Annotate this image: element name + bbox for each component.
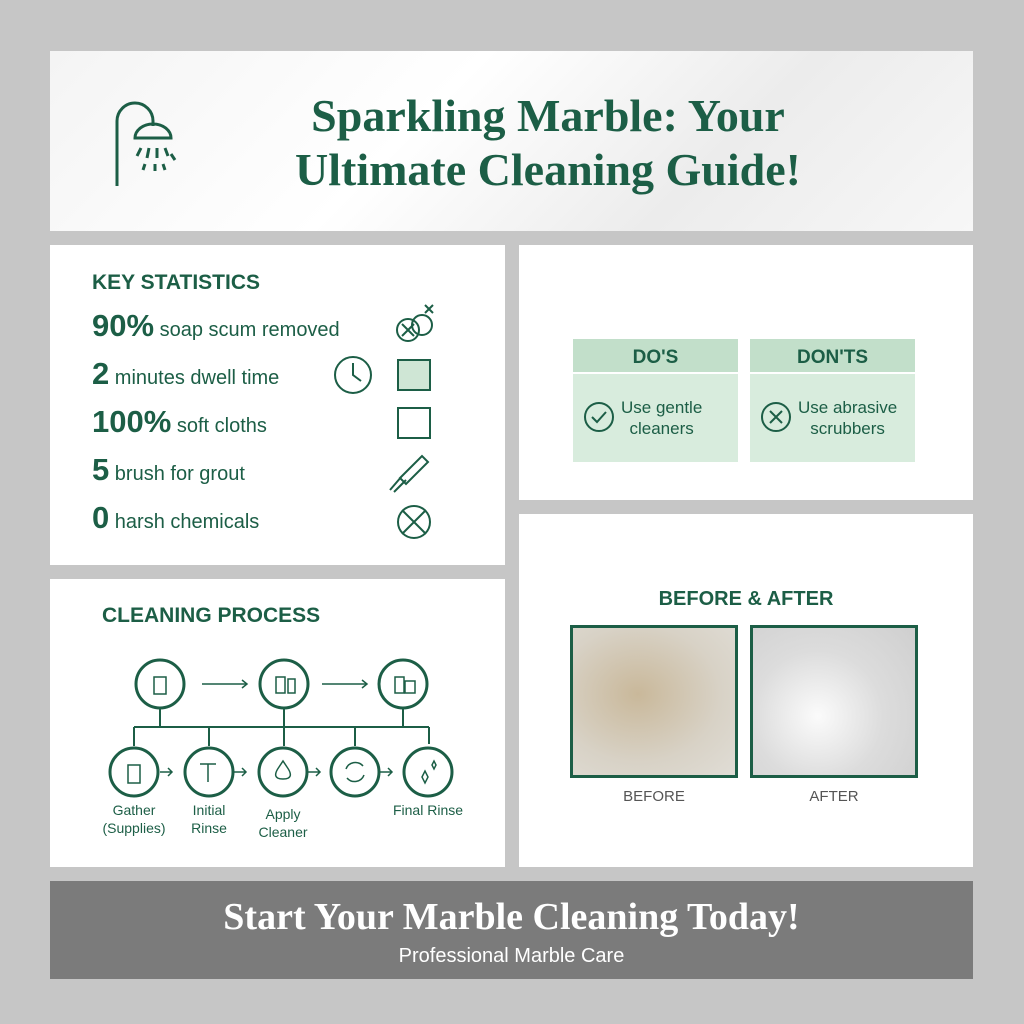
do's column: DO'S [633,347,678,368]
heading: KEY STATISTICS [92,271,260,294]
footer subtitle: Professional Marble Care [399,945,624,967]
stat rows: 90% soap scum removed [92,308,340,343]
title: Sparkling Marble: Your [311,90,785,141]
don'ts column [750,339,915,462]
step labels [102,802,166,836]
heading: BEFORE & AFTER [659,588,833,610]
do's column: Use gentle [621,398,702,417]
do's column [573,339,738,462]
heading: CLEANING PROCESS [102,604,320,627]
panel: do's and don'ts [519,245,973,500]
panel: cleaning process: Cleaner [258,824,308,840]
stat rows [92,308,340,535]
panel: key statistics [50,245,505,565]
do's column: cleaners [630,419,694,438]
panel: cleaning process: Initial [193,802,225,818]
image: before [570,625,738,778]
panel: cleaning process [50,579,505,867]
process diagram [108,658,454,798]
icon: shower [116,102,176,186]
footer title: Start Your Marble Cleaning Today! [223,896,800,938]
title: Ultimate Cleaning Guide! [295,144,801,195]
header panel [50,51,973,231]
stat rows: 100% soft cloths [92,404,267,439]
don'ts column: scrubbers [810,419,885,438]
step labels: (Supplies) [102,820,166,836]
don'ts column: Use abrasive [798,398,897,417]
panel: cleaning process: Rinse [191,820,227,836]
footer banner [50,881,973,979]
stat rows: 5 brush for grout [92,452,245,487]
title [295,90,801,195]
panel: before & after [519,514,973,867]
panel: cleaning process: Final Rinse [393,802,463,818]
stat rows: 2 minutes dwell time [92,356,279,391]
icons: stats [334,304,434,539]
label: after: AFTER [809,788,859,805]
don'ts column: DON'TS [797,347,868,368]
stat rows: 0 harsh chemicals [92,500,259,535]
panel: cleaning process: Apply [265,806,301,822]
label: before: BEFORE [623,788,685,805]
step labels: Gather [113,802,155,818]
image: after [750,625,918,778]
